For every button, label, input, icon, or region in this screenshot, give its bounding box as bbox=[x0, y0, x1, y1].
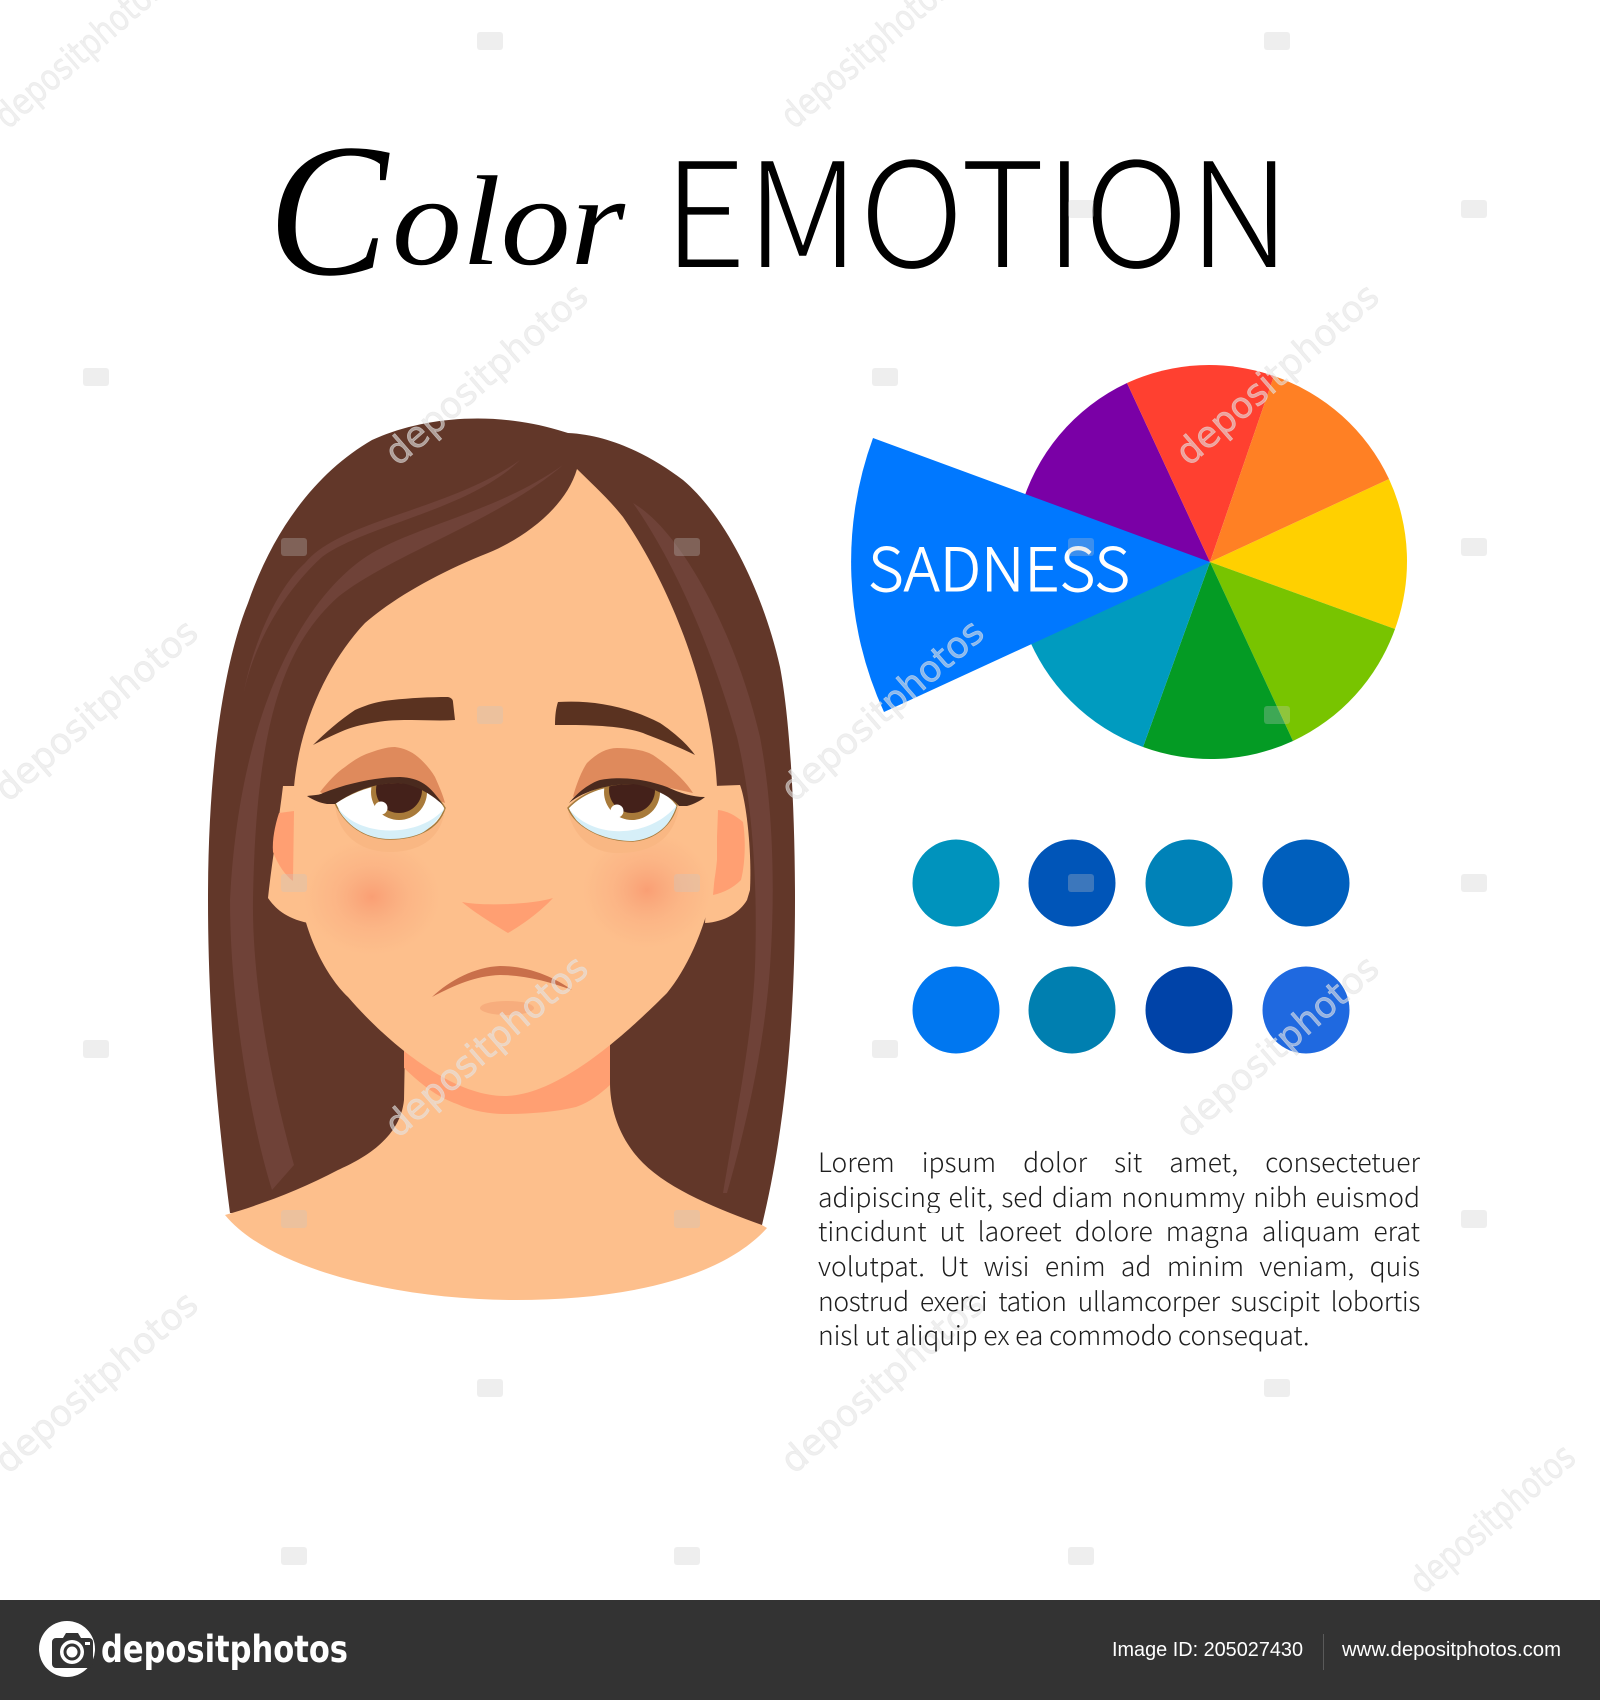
swatch row 1 bbox=[912, 840, 1350, 926]
eye highlight left bbox=[374, 802, 388, 814]
wheel slice: orange bbox=[1210, 376, 1389, 562]
under-eye shadow right bbox=[568, 808, 679, 853]
left eyebrow bbox=[313, 697, 455, 745]
face bbox=[294, 469, 717, 1096]
wheel slice: yellow bbox=[1210, 479, 1407, 629]
right cheek blush bbox=[583, 832, 711, 948]
hair highlight: right strand bbox=[633, 503, 773, 1193]
eye white right bbox=[568, 784, 677, 841]
wheel slice: purple bbox=[1020, 383, 1210, 562]
left cheek blush bbox=[304, 839, 440, 955]
footer bar bbox=[0, 1600, 1600, 1700]
lower lip shadow bbox=[480, 1001, 534, 1015]
watermarks: depositphotos bbox=[773, 1284, 992, 1482]
right eye bbox=[568, 748, 705, 853]
footer background bbox=[0, 1600, 1600, 1700]
website: www.depositphotos.com bbox=[1341, 1639, 1561, 1661]
title script word: Color: C bbox=[268, 106, 390, 316]
upper lid left bbox=[307, 777, 443, 805]
iris left bbox=[338, 783, 445, 839]
footer divider bbox=[1323, 1634, 1324, 1670]
swatch row 2 bbox=[912, 966, 1350, 1054]
colour wheel bbox=[851, 365, 1407, 759]
eye white left bbox=[335, 783, 445, 839]
upper lid right bbox=[569, 778, 705, 806]
left eye bbox=[307, 747, 445, 852]
paragraph text bbox=[818, 1144, 1420, 1352]
eye highlight right bbox=[610, 804, 624, 818]
right ear bbox=[705, 785, 750, 923]
watermarks: depositphotos bbox=[377, 276, 596, 474]
title bbox=[268, 99, 1290, 316]
colour swatches bbox=[912, 840, 1350, 1054]
neck shadow bbox=[404, 1040, 610, 1114]
title word: EMOTION: EMOTION bbox=[664, 99, 1290, 309]
wheel slice: green bbox=[1143, 562, 1293, 759]
iris right bbox=[570, 784, 677, 841]
hair bbox=[208, 419, 795, 1225]
watermarks: depositphotos bbox=[1168, 948, 1387, 1146]
left ear shadow bbox=[273, 811, 294, 881]
illustration: sad woman face bbox=[208, 419, 795, 1300]
hair highlight: upper streak bbox=[242, 460, 520, 703]
eyeshadow right bbox=[573, 748, 693, 797]
eyeshadow left bbox=[320, 747, 445, 803]
watermarks: depositphotos bbox=[773, 612, 992, 810]
watermarks: depositphotos bbox=[377, 948, 596, 1146]
enlarged blue slice bbox=[851, 438, 1210, 712]
label: SADNESS: SADNESS bbox=[868, 522, 1130, 609]
nose bbox=[462, 898, 553, 933]
under-eye shadow left bbox=[335, 805, 444, 852]
wheel slice: red bbox=[1127, 365, 1274, 562]
wheel slice: teal bbox=[1025, 562, 1210, 747]
right eyebrow bbox=[555, 702, 695, 755]
right ear shadow bbox=[713, 810, 745, 895]
title script word: Color: olor bbox=[392, 150, 626, 292]
hair highlight: long left strand bbox=[230, 465, 563, 1190]
neck and shoulders bbox=[225, 1045, 767, 1300]
logo wordmark: depositphotos bbox=[101, 1628, 348, 1671]
logo icon: camera bbox=[39, 1621, 95, 1677]
mouth bbox=[432, 966, 572, 997]
image id: Image ID: 205027430 bbox=[1112, 1639, 1303, 1661]
left ear bbox=[268, 786, 308, 923]
wheel slice: lime bbox=[1210, 562, 1395, 741]
watermarks: depositphotos bbox=[1168, 276, 1387, 474]
